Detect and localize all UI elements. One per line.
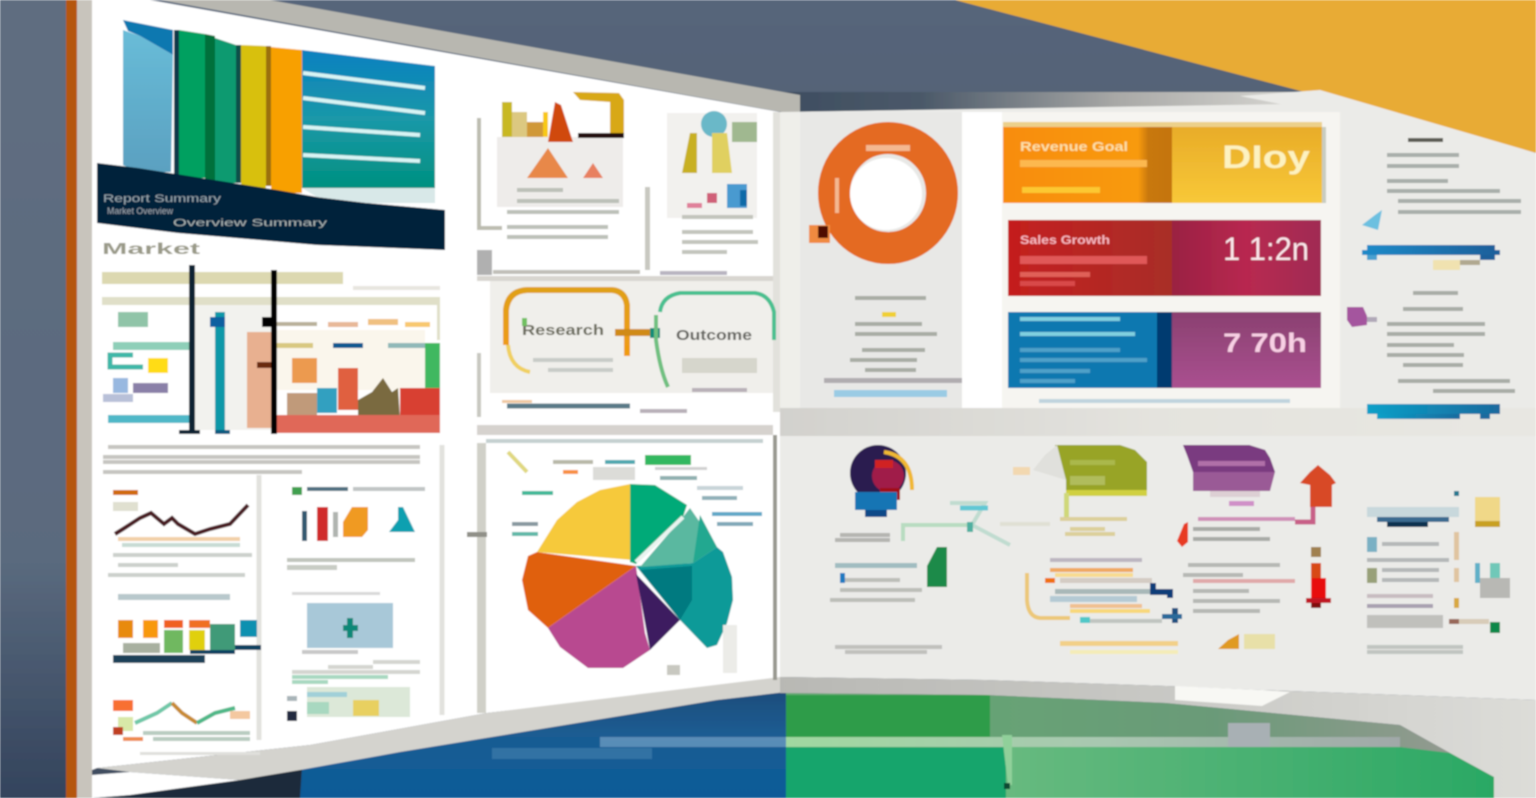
stat row orange: Revenue Goal — [1020, 139, 1128, 154]
small line chart panel — [113, 700, 260, 755]
right board — [780, 104, 1536, 798]
right text column — [1347, 138, 1521, 419]
connector — [615, 328, 660, 338]
middle band background — [490, 281, 773, 393]
pie chart — [522, 484, 733, 668]
white sheet — [92, 0, 800, 798]
poster heading: Market — [102, 241, 201, 258]
stat row blue — [1008, 312, 1321, 403]
top middle card two — [667, 111, 758, 252]
floor: green — [786, 693, 1494, 798]
stat row red: Sales Growth — [1020, 233, 1110, 247]
olive banner — [1013, 445, 1147, 534]
pill: outcome — [656, 293, 774, 392]
stat row orange — [1003, 122, 1326, 203]
globe icon — [850, 445, 912, 517]
floor: navy and blue — [92, 692, 786, 798]
dark caption band: Overview Summary — [173, 218, 327, 229]
dark caption band — [97, 163, 445, 250]
dark caption band: Market Overview — [107, 206, 173, 216]
connector with paper plane — [903, 503, 1050, 545]
bar illustration — [123, 20, 435, 193]
orange marker with chip — [1218, 634, 1275, 649]
purple banner — [1183, 445, 1275, 506]
stacked bars panel — [113, 594, 261, 663]
main mixed chart — [102, 265, 440, 434]
pie panel — [467, 425, 777, 713]
pill: research — [506, 290, 627, 372]
red up arrow with connector — [1177, 465, 1336, 547]
top middle card one — [479, 92, 624, 237]
panel dividers — [259, 445, 442, 740]
donut caption — [824, 298, 962, 397]
caption strip under pills — [479, 353, 687, 417]
stat row blue: 7 70h — [1223, 328, 1307, 358]
orange board edge — [66, 0, 92, 798]
line chart panel — [108, 490, 252, 575]
left poster — [97, 20, 445, 755]
donut — [809, 138, 942, 248]
pill: research: Research — [522, 322, 604, 339]
far right list — [1367, 532, 1510, 652]
dark caption band: Report Summary — [103, 193, 222, 205]
flow diagram — [1027, 558, 1182, 654]
stat row red: 1 1:2n — [1223, 231, 1309, 267]
middle text lines — [1183, 565, 1280, 611]
green and yellow table — [287, 662, 420, 721]
bottom caption left — [835, 647, 942, 652]
text lines under main chart — [103, 447, 420, 472]
pink text line — [1193, 579, 1295, 583]
far right chart block — [1367, 491, 1500, 527]
globe caption — [835, 535, 890, 540]
red thermometer — [1306, 547, 1331, 608]
stat row orange: DIoy — [1222, 139, 1310, 175]
card dividers — [477, 187, 773, 281]
green icon with caption — [830, 547, 947, 600]
bars and shapes panel — [287, 487, 425, 570]
pill: outcome: Outcome — [676, 327, 752, 344]
stat row red — [1008, 220, 1321, 296]
pie labels — [508, 452, 762, 675]
right strip between sheets — [773, 112, 800, 412]
blue cross panel — [292, 592, 393, 654]
